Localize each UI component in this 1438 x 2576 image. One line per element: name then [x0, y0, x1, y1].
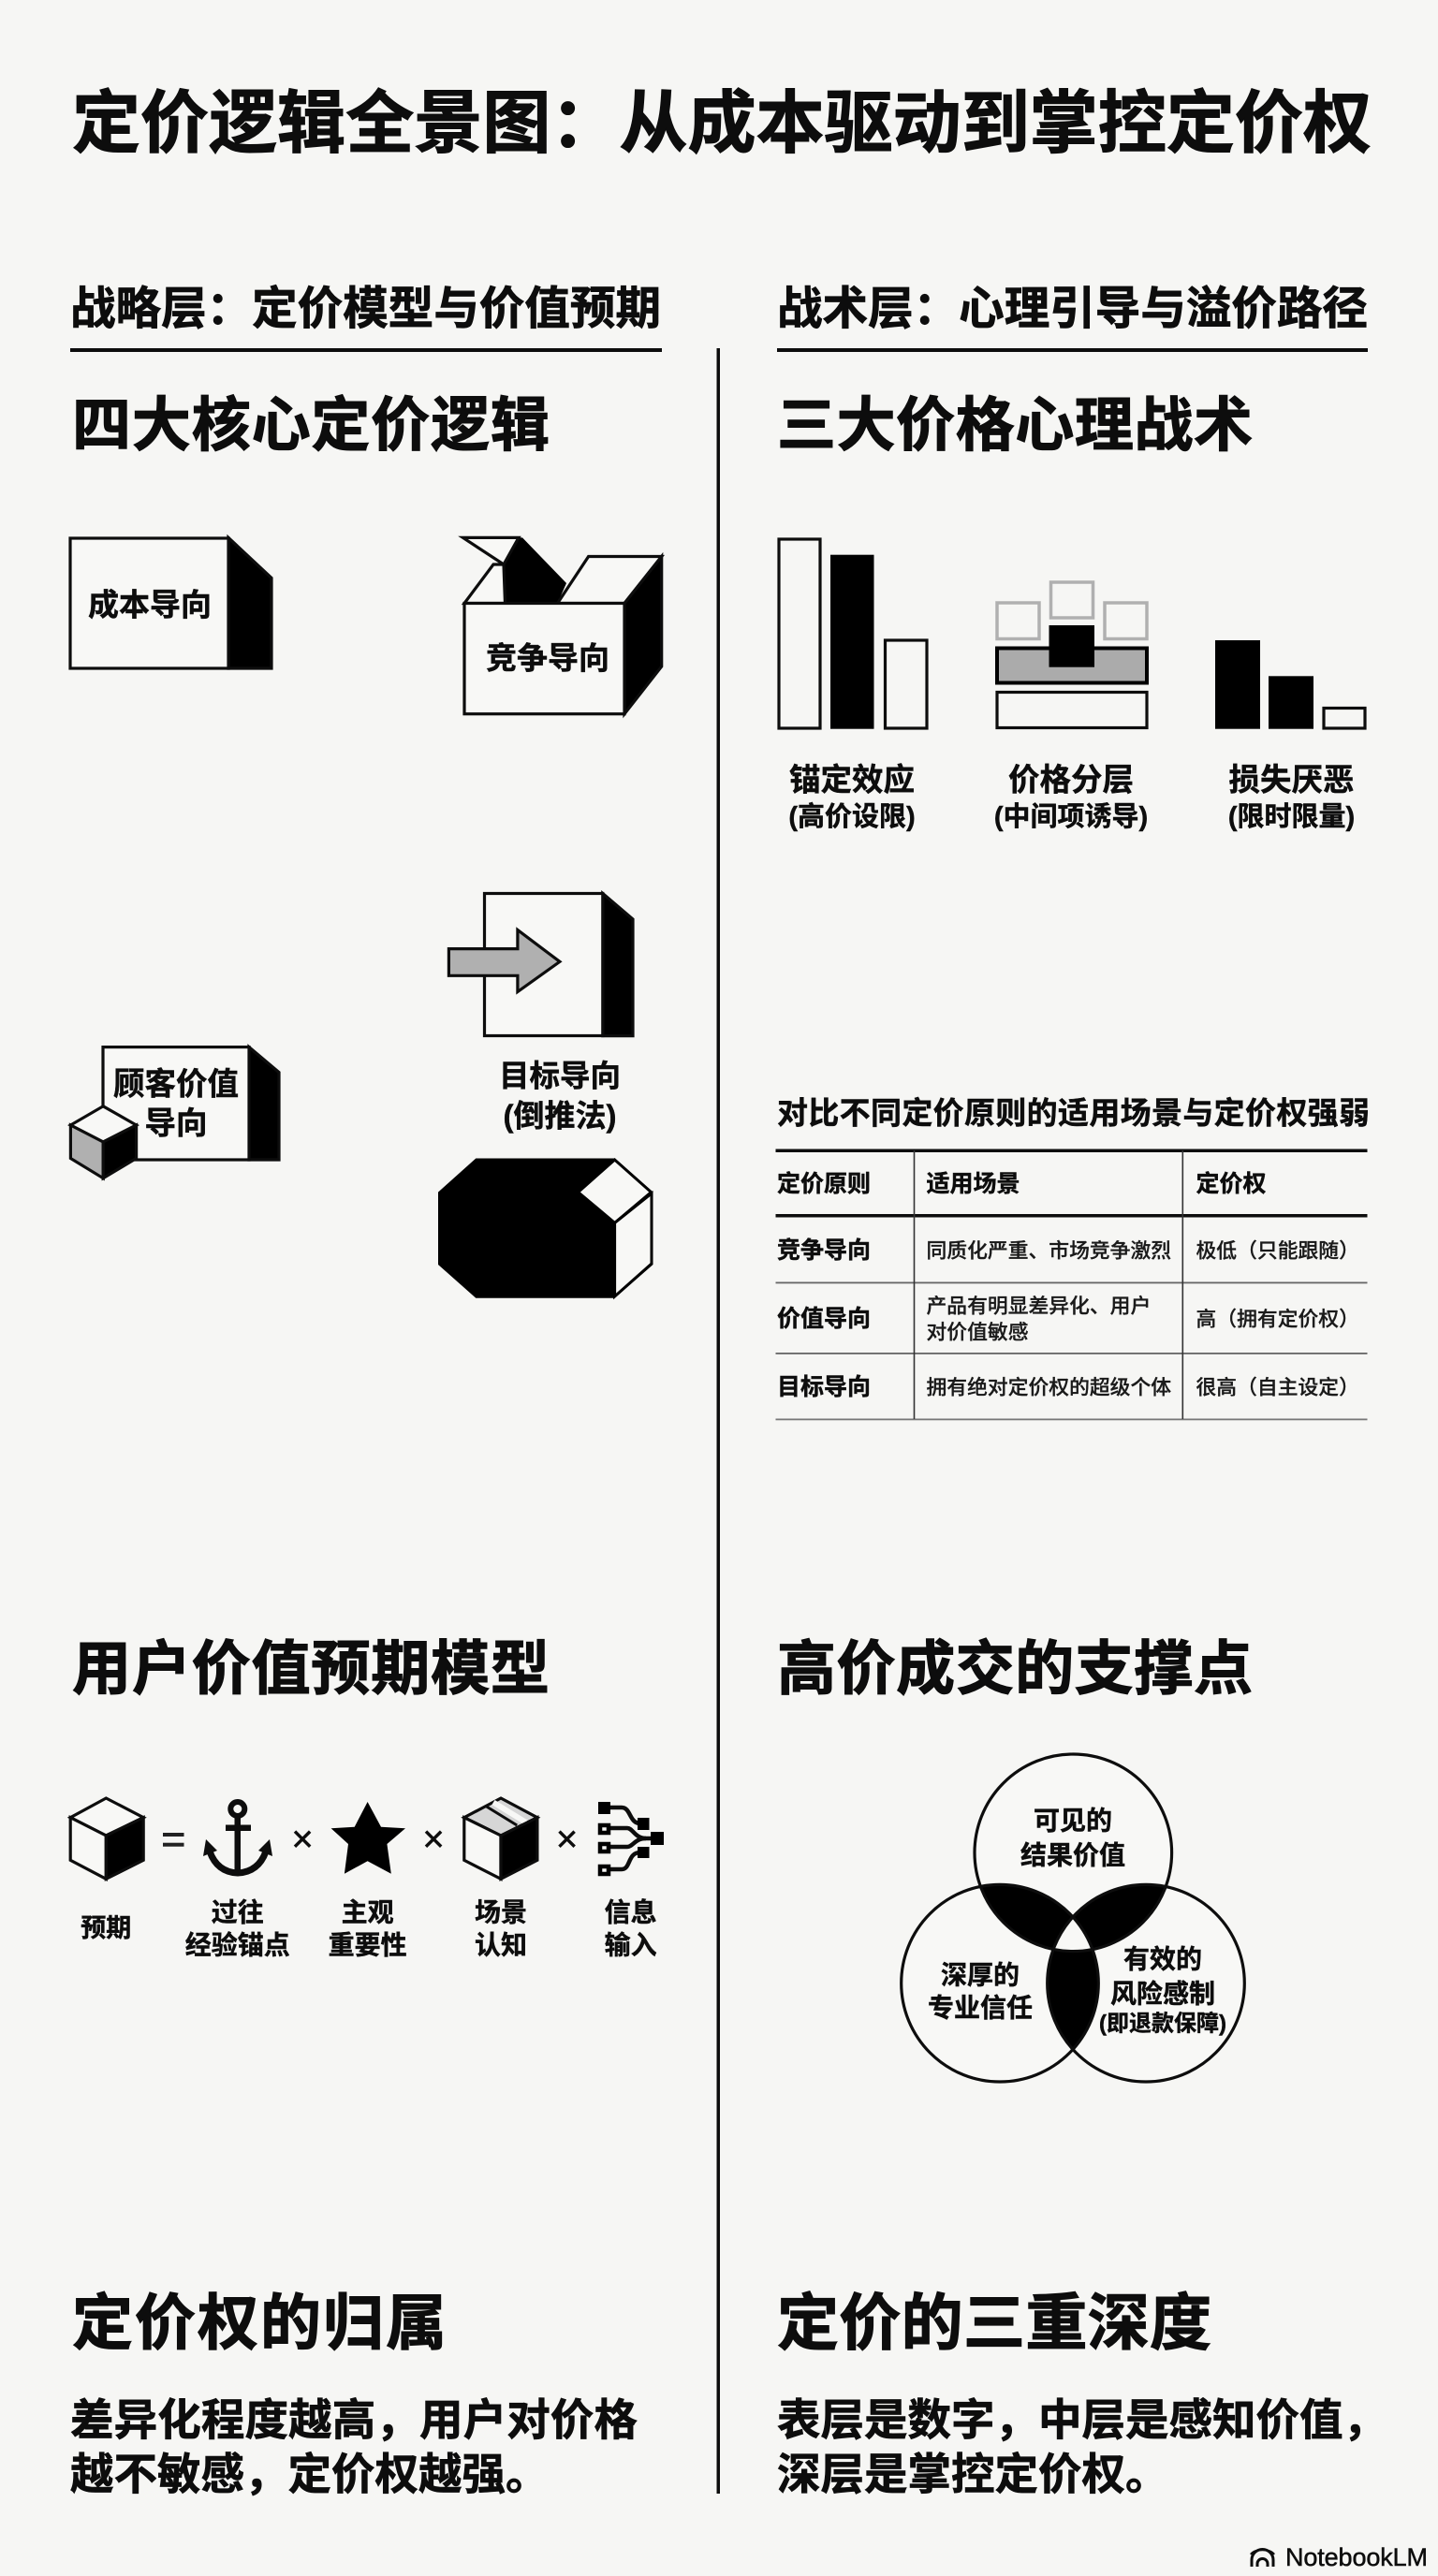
- table row: value: [777, 1294, 1359, 1344]
- center divider: [717, 348, 720, 2494]
- text: three depths explanation: 深层是掌控定价权。: [777, 2451, 1168, 2499]
- heading: user value expectation model: 用户价值预期模型: [72, 1636, 550, 1702]
- text: three depths explanation: [777, 2396, 1387, 2499]
- venn label: deep professional trust: 深厚的: [941, 1960, 1020, 1990]
- chart: price tiers: [997, 582, 1147, 728]
- heading: four core pricing logics: 四大核心定价逻辑: [72, 393, 550, 459]
- symbol: equals: [163, 1833, 183, 1847]
- table row: competition: 竞争导向: [777, 1237, 871, 1264]
- venn label: visible result value: 结果价值: [1020, 1840, 1125, 1870]
- label: target-oriented: [499, 1060, 621, 1133]
- icon: anchor: [203, 1802, 272, 1873]
- symbol: times 2: ×: [422, 1819, 445, 1860]
- chart: anchoring bars: [779, 539, 927, 729]
- text: three depths explanation: 表层是数字，中层是感知价值，: [777, 2396, 1387, 2445]
- icon: competition-oriented open box: [462, 537, 662, 714]
- venn label: effective risk control: [1099, 1945, 1226, 2037]
- text: ownership explanation: 差异化程度越高，用户对价格: [70, 2396, 638, 2445]
- label: expectation: 预期: [81, 1914, 131, 1942]
- venn label: visible result value: [1020, 1807, 1125, 1870]
- label: scene cognition: 认知: [475, 1930, 527, 1960]
- heading: tactics layer: 战术层：心理引导与溢价路径: [777, 284, 1368, 334]
- heading: three depths of pricing: 定价的三重深度: [777, 2288, 1211, 2357]
- icon: expectation cube: [70, 1798, 143, 1879]
- icon: customer value box with small cube: 顾客价值: [113, 1067, 239, 1103]
- label: past experience anchor: 过往: [212, 1898, 264, 1926]
- table: pricing principles comparison: [775, 1149, 1367, 1420]
- title: 定价逻辑全景图：从成本驱动到掌控定价权: [72, 86, 1372, 161]
- label: information input: 输入: [605, 1930, 657, 1960]
- venn label: effective risk control: 有效的: [1123, 1945, 1202, 1973]
- panel: three depths of pricing: [777, 2288, 1387, 2499]
- chart: venn diagram: [902, 1754, 1244, 2082]
- icon: large black block: [438, 1159, 653, 1298]
- icon: scene box: [464, 1798, 537, 1879]
- icon: customer value box with small cube: [70, 1047, 279, 1178]
- label: subjective importance: 主观: [342, 1898, 394, 1926]
- table header row: 定价权: [1196, 1171, 1267, 1197]
- label: information input: 信息: [605, 1898, 657, 1926]
- icon: competition-oriented open box: 竞争导向: [486, 640, 609, 676]
- venn label: deep professional trust: [928, 1960, 1033, 2022]
- venn label: effective risk control: 风险感制: [1110, 1979, 1215, 2009]
- heading: ownership of pricing power: 定价权的归属: [72, 2289, 447, 2357]
- table row: competition: [777, 1237, 1359, 1264]
- label: anchoring effect: [788, 764, 916, 832]
- icon: cost-oriented box: 成本导向: [88, 588, 212, 622]
- table header row: 定价原则: [777, 1171, 871, 1197]
- label: price tiers: [994, 764, 1148, 832]
- label: subjective importance: [329, 1898, 407, 1960]
- venn label: visible result value: 可见的: [1034, 1807, 1112, 1835]
- table row: value: 产品有明显差异化、用户: [927, 1294, 1151, 1318]
- table header row: [777, 1171, 1267, 1197]
- label: past experience anchor: 经验锚点: [185, 1930, 290, 1960]
- table row: target: 目标导向: [777, 1374, 871, 1400]
- heading: three price psychology tactics: 三大价格心理战术: [777, 393, 1253, 459]
- label: scene cognition: 场景: [475, 1898, 527, 1926]
- label: anchoring effect: (高价设限): [788, 801, 916, 832]
- label: information input: [605, 1898, 657, 1960]
- text: ownership explanation: [70, 2396, 638, 2499]
- table row: competition: 极低（只能跟随）: [1196, 1239, 1359, 1262]
- label: loss aversion: [1228, 764, 1355, 832]
- heading: high price support points: 高价成交的支撑点: [777, 1636, 1253, 1702]
- symbol: times 1: ×: [291, 1819, 314, 1860]
- table header row: 适用场景: [927, 1171, 1020, 1197]
- icon: information network: [598, 1802, 664, 1874]
- table row: target: [777, 1374, 1359, 1400]
- table row: value: 对价值敏感: [927, 1320, 1028, 1344]
- icon: star: [331, 1802, 405, 1874]
- text: ownership explanation: 越不敏感，定价权越强。: [70, 2451, 549, 2499]
- venn label: deep professional trust: 专业信任: [928, 1994, 1033, 2022]
- label: subjective importance: 重要性: [329, 1930, 407, 1960]
- label: price tiers: (中间项诱导): [994, 801, 1148, 832]
- label: past experience anchor: [185, 1898, 290, 1960]
- heading: strategy layer: 战略层：定价模型与价值预期: [70, 284, 661, 334]
- symbol: times 3: ×: [556, 1819, 578, 1860]
- chart: loss aversion bars: [1215, 640, 1365, 729]
- icon: cost-oriented box: [70, 537, 271, 668]
- icon: target-oriented box with arrow: [448, 893, 633, 1036]
- label: target-oriented: 目标导向: [499, 1060, 621, 1093]
- table title: 对比不同定价原则的适用场景与定价权强弱: [777, 1095, 1370, 1131]
- venn label: effective risk control: (即退款保障): [1099, 2011, 1226, 2037]
- table row: target: 很高（自主设定）: [1196, 1376, 1359, 1398]
- table row: competition: 同质化严重、市场竞争激烈: [927, 1239, 1171, 1262]
- label: loss aversion: 损失厌恶: [1228, 764, 1354, 798]
- label: loss aversion: (限时限量): [1228, 801, 1355, 832]
- label: target-oriented: (倒推法): [504, 1099, 616, 1133]
- panel: ownership of pricing power: [70, 2289, 638, 2499]
- label: scene cognition: [475, 1898, 527, 1960]
- table row: value: 价值导向: [777, 1306, 871, 1332]
- logo: NotebookLM: NotebookLM: [1285, 2543, 1428, 2571]
- label: anchoring effect: 锚定效应: [789, 764, 915, 798]
- label: price tiers: 价格分层: [1008, 764, 1134, 798]
- table row: target: 拥有绝对定价权的超级个体: [927, 1376, 1171, 1398]
- icon: customer value box with small cube: 导向: [144, 1106, 208, 1142]
- table row: value: 高（拥有定价权）: [1196, 1307, 1359, 1331]
